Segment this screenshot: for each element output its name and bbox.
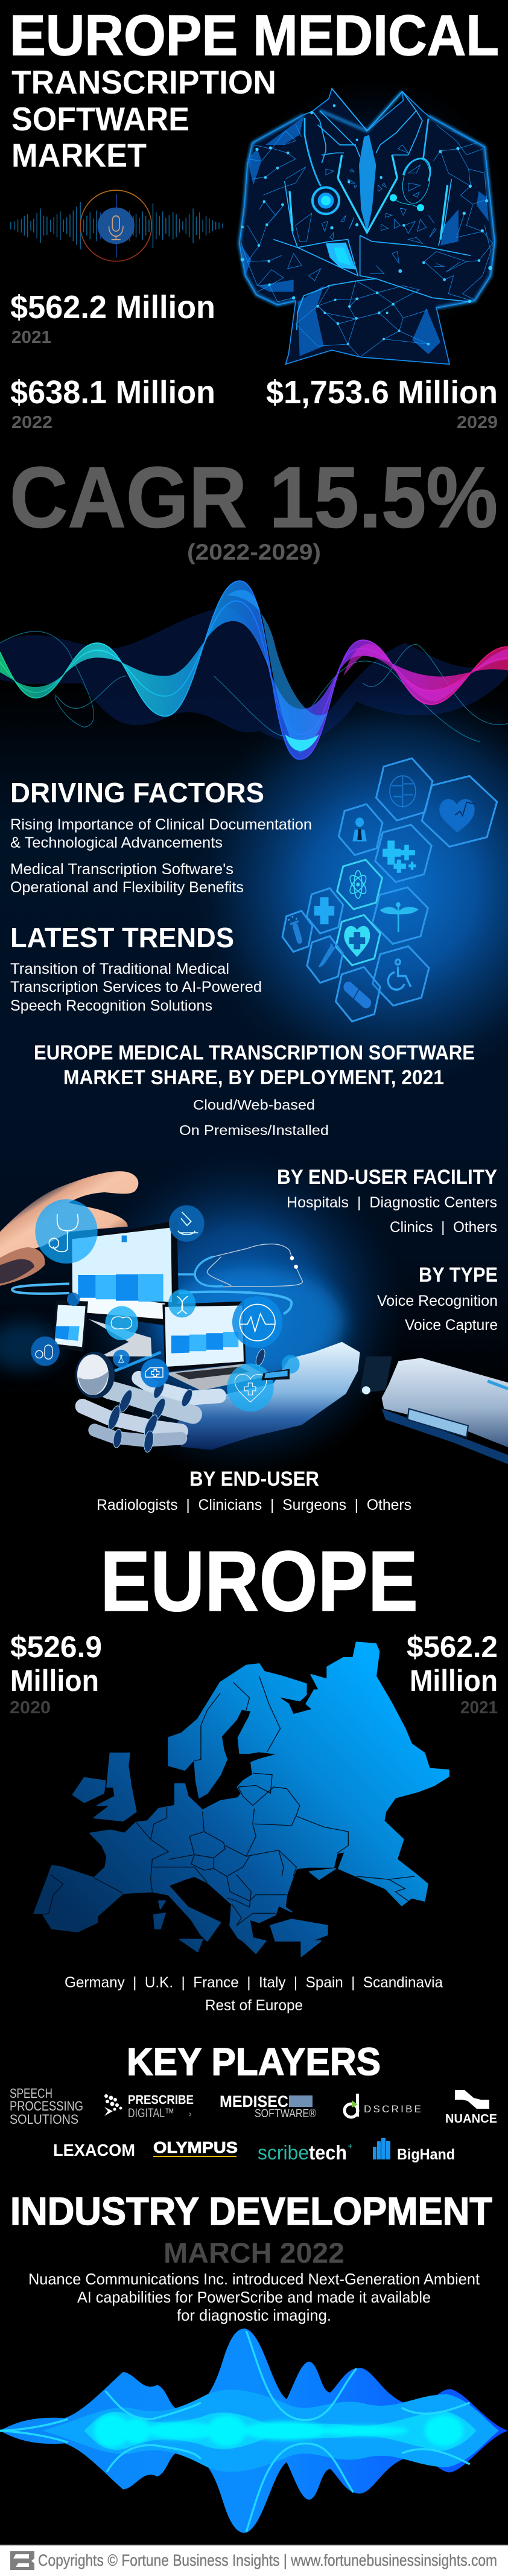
- text block: driving factors: Medical Transcription Software's: [10, 861, 233, 878]
- stat: 2021 Europe: [407, 1630, 498, 1718]
- section heading: deployment share: MARKET SHARE, BY DEPLOYMENT, 2021: [63, 1066, 444, 1089]
- human hand: [0, 1171, 138, 1286]
- text block: latest trends: Speech Recognition Solutions: [10, 997, 212, 1014]
- logo: dScribe: DSCRIBE: [364, 2103, 421, 2115]
- logo: Scribetech: +: [348, 2141, 353, 2152]
- stat: 2022 market size: $638.1 Million: [10, 374, 215, 411]
- icon: syringe: [319, 944, 334, 967]
- robot hand: [83, 1342, 360, 1453]
- heading: latest trends: LATEST TRENDS: [10, 922, 234, 953]
- icon: heart with pulse: [439, 799, 475, 833]
- logo: Nuance: [445, 2090, 497, 2126]
- logo: Speech Processing Solutions: [10, 2086, 83, 2127]
- icon: test tube: [288, 915, 305, 945]
- deployment segments: Cloud/Web-based: [193, 1097, 315, 1113]
- logo: Scribetech: tech: [309, 2141, 347, 2164]
- stat: 2020 Europe: $526.9: [10, 1630, 102, 1664]
- logo: Prescribe Digital: ›: [189, 2109, 192, 2118]
- stat: 2029 market size: $1,753.6 Million: [266, 374, 498, 411]
- colourful sound wave: [0, 581, 508, 759]
- stat: 2021 market size: $562.2 Million: [10, 289, 215, 325]
- logo: dScribe: [344, 2094, 421, 2117]
- stat: 2029 market size: 2029: [457, 413, 498, 432]
- segment: by end-user facility: Hospitals | Diagnostic Centers: [287, 1194, 497, 1211]
- segment: by type: Voice Capture: [405, 1317, 498, 1334]
- heading: driving factors: DRIVING FACTORS: [10, 777, 264, 808]
- icon: heart with cross: [344, 926, 370, 957]
- logo: Scribetech: [258, 2141, 353, 2164]
- stat: 2022 market size: [10, 374, 215, 432]
- heading: industry development: INDUSTRY DEVELOPMENT: [10, 2189, 492, 2233]
- CAGR headline: (2022-2029): [187, 540, 321, 564]
- blue sound wave: [0, 2328, 508, 2533]
- logo: Speech Processing Solutions: SPEECH: [10, 2086, 52, 2101]
- text block: driving factors: Rising Importance of Clinical Documentation: [10, 816, 312, 833]
- icon: plus signs: [383, 840, 416, 873]
- hexagon medical icons: [282, 758, 497, 1021]
- segment: by type: [377, 1264, 498, 1334]
- deployment segments: [179, 1097, 329, 1138]
- icon: caduceus: [379, 902, 419, 932]
- logo: BigHand: [373, 2138, 455, 2163]
- development date: MARCH 2022: [164, 2237, 344, 2269]
- illustration: robot hand holding devices: [0, 1144, 508, 1482]
- text block: driving factors: [10, 816, 312, 896]
- stat: 2021 market size: 2021: [11, 328, 51, 347]
- icon: medical cross: [314, 897, 334, 924]
- icon: doctor: [352, 817, 367, 842]
- text block: driving factors: Operational and Flexibility Benefits: [10, 879, 244, 896]
- stat: 2021 Europe: $562.2: [407, 1630, 498, 1664]
- title: TRANSCRIPTION: [11, 63, 276, 101]
- logo: Medisec Software: MEDISEC: [220, 2092, 288, 2111]
- regions list: Rest of Europe: [205, 1997, 303, 2014]
- logo: Speech Processing Solutions: SOLUTIONS: [10, 2112, 78, 2127]
- map of Europe: [34, 1642, 449, 1957]
- stethoscope chest piece: [75, 1352, 115, 1398]
- logo: BigHand: BigHand: [397, 2146, 455, 2163]
- icon: pill: [341, 979, 373, 1011]
- stat: 2021 Europe: 2021: [460, 1698, 498, 1718]
- regions list: Germany | U.K. | France | Italy | Spain | Scandinavia: [65, 1974, 443, 1991]
- development description: for diagnostic imaging.: [177, 2306, 331, 2324]
- stat: 2022 market size: 2022: [11, 413, 52, 432]
- stat: 2020 Europe: 2020: [10, 1698, 51, 1718]
- logo: Medisec Software: [220, 2092, 316, 2120]
- segment: by type: BY TYPE: [419, 1264, 498, 1286]
- logo: Prescribe Digital: [104, 2093, 194, 2120]
- logo: Prescribe Digital: DIGITAL™: [128, 2106, 174, 2120]
- logo: Olympus: OLYMPUS: [153, 2138, 238, 2156]
- title: MARKET: [11, 136, 147, 174]
- tablet: [52, 1300, 88, 1352]
- icon: Fortune Business Insights logo: [10, 2551, 34, 2570]
- stethoscope tubing: [12, 1244, 303, 1371]
- segment: by type: Voice Recognition: [377, 1293, 498, 1309]
- logo: Lexacom: LEXACOM: [53, 2141, 135, 2159]
- logo: Medisec Software: SOFTWARE®: [255, 2108, 316, 2120]
- logo: Nuance: NUANCE: [445, 2112, 497, 2126]
- desktop monitor: [69, 1220, 179, 1357]
- regions list: [65, 1974, 443, 2014]
- text block: latest trends: [10, 960, 262, 1014]
- stat: 2029 market size: [266, 374, 498, 432]
- segment: by end-user: [97, 1468, 411, 1513]
- heading: key players: KEY PLAYERS: [127, 2040, 381, 2083]
- stat: 2020 Europe: Million: [10, 1664, 99, 1698]
- stat: 2021 market size: [10, 289, 215, 347]
- doctor figure illustration: [229, 75, 508, 374]
- logo: Prescribe Digital: PRESCRIBE: [128, 2093, 194, 2107]
- text block: latest trends: Transcription Services to AI-Powered: [10, 979, 262, 996]
- logo: Scribetech: scribe: [258, 2141, 309, 2164]
- icon: brain: [390, 776, 416, 808]
- segment: by end-user facility: Clinics | Others: [390, 1219, 497, 1236]
- segment: by end-user facility: BY END-USER FACILITY: [277, 1166, 497, 1189]
- icon: voice waveform with microphone: [11, 190, 223, 261]
- heading: Europe: EUROPE: [100, 1533, 418, 1629]
- title: SOFTWARE: [11, 100, 189, 138]
- segment: by end-user: Radiologists | Clinicians | Surgeons | Others: [97, 1497, 411, 1513]
- logo: Speech Processing Solutions: PROCESSING: [10, 2098, 83, 2114]
- text block: driving factors: & Technological Advancements: [10, 834, 223, 851]
- title: [10, 4, 499, 174]
- text block: latest trends: Transition of Traditional Medical: [10, 960, 229, 977]
- development description: [28, 2270, 480, 2324]
- laptop: [162, 1302, 267, 1391]
- floating health icons: [31, 1199, 300, 1411]
- segment: by end-user facility: [277, 1166, 497, 1236]
- development description: Nuance Communications Inc. introduced Next-Generation Ambient: [28, 2270, 480, 2288]
- development description: AI capabilities for PowerScribe and made it available: [77, 2288, 431, 2306]
- segment: by end-user: BY END-USER: [189, 1468, 319, 1491]
- section heading: deployment share: EUROPE MEDICAL TRANSCRIPTION SOFTWARE: [34, 1041, 475, 1064]
- robot arm: [360, 1357, 508, 1464]
- stat: 2021 Europe: Million: [410, 1664, 498, 1698]
- section heading: deployment share: [34, 1041, 475, 1089]
- icon: atom: [348, 871, 369, 898]
- footer band: [0, 2545, 508, 2576]
- icon: wheelchair: [388, 959, 411, 989]
- stat: 2020 Europe: [10, 1630, 102, 1718]
- deployment segments: On Premises/Installed: [179, 1122, 329, 1138]
